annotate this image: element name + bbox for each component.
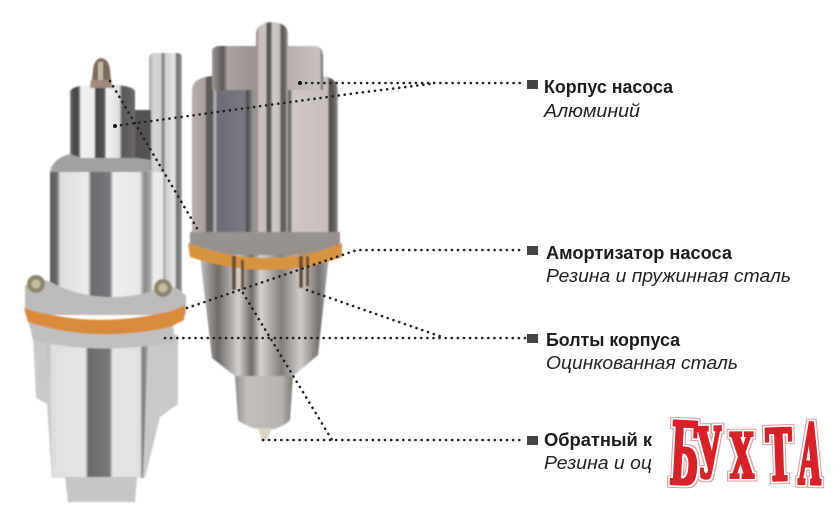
label: pump damper: Амортизатор насоса	[546, 243, 733, 263]
logo: БУХТА: У	[696, 411, 724, 495]
label: pump damper: Резина и пружинная сталь	[546, 266, 791, 286]
left pump top cap nut	[90, 58, 113, 88]
logo: БУХТА: А	[797, 403, 824, 505]
logo: БУХТА: Т	[765, 414, 794, 499]
left pump connector block	[135, 110, 151, 170]
right pump flange	[190, 232, 340, 261]
leader lines	[110, 81, 525, 440]
label: pump housing: Корпус насоса	[544, 77, 674, 97]
right pump nozzle	[258, 428, 272, 441]
left pump upper body	[50, 172, 165, 300]
label: housing bolts: Оцинкованная сталь	[546, 353, 738, 373]
left pump foot	[65, 477, 137, 502]
left pump outlet pipe	[149, 53, 182, 300]
left pump lower flanks	[33, 335, 178, 478]
left pump rubber band	[24, 305, 186, 334]
left pump flange	[25, 280, 186, 315]
right pump rubber band	[188, 243, 342, 270]
right pump bolts	[232, 256, 309, 290]
logo: БУХТА: Х	[730, 418, 754, 493]
label: check valve: Обратный к	[544, 430, 653, 450]
left pump band lower edge	[28, 320, 176, 349]
right pump lower cylinder	[235, 376, 293, 430]
left pump bolts	[27, 275, 172, 297]
right pump lower body	[200, 255, 329, 376]
label: housing bolts: Болты корпуса	[546, 330, 681, 350]
right pump body	[192, 76, 338, 236]
logo: БУХТА: Б	[668, 402, 701, 507]
label: check valve	[527, 430, 653, 473]
label: pump housing: Алюминий	[543, 101, 640, 121]
label: pump damper	[527, 243, 791, 286]
label: pump housing	[527, 77, 674, 121]
right pump top block	[212, 46, 323, 90]
left pump illustration	[24, 22, 342, 502]
left pump shoulder	[50, 154, 151, 174]
label: check valve: Резина и оц	[544, 453, 652, 473]
logo: БУХТА	[668, 402, 824, 507]
left pump lower body	[47, 340, 148, 478]
left pump upper cylinder	[70, 84, 135, 160]
right pump outlet pipe	[256, 22, 288, 238]
label: housing bolts	[527, 330, 738, 373]
